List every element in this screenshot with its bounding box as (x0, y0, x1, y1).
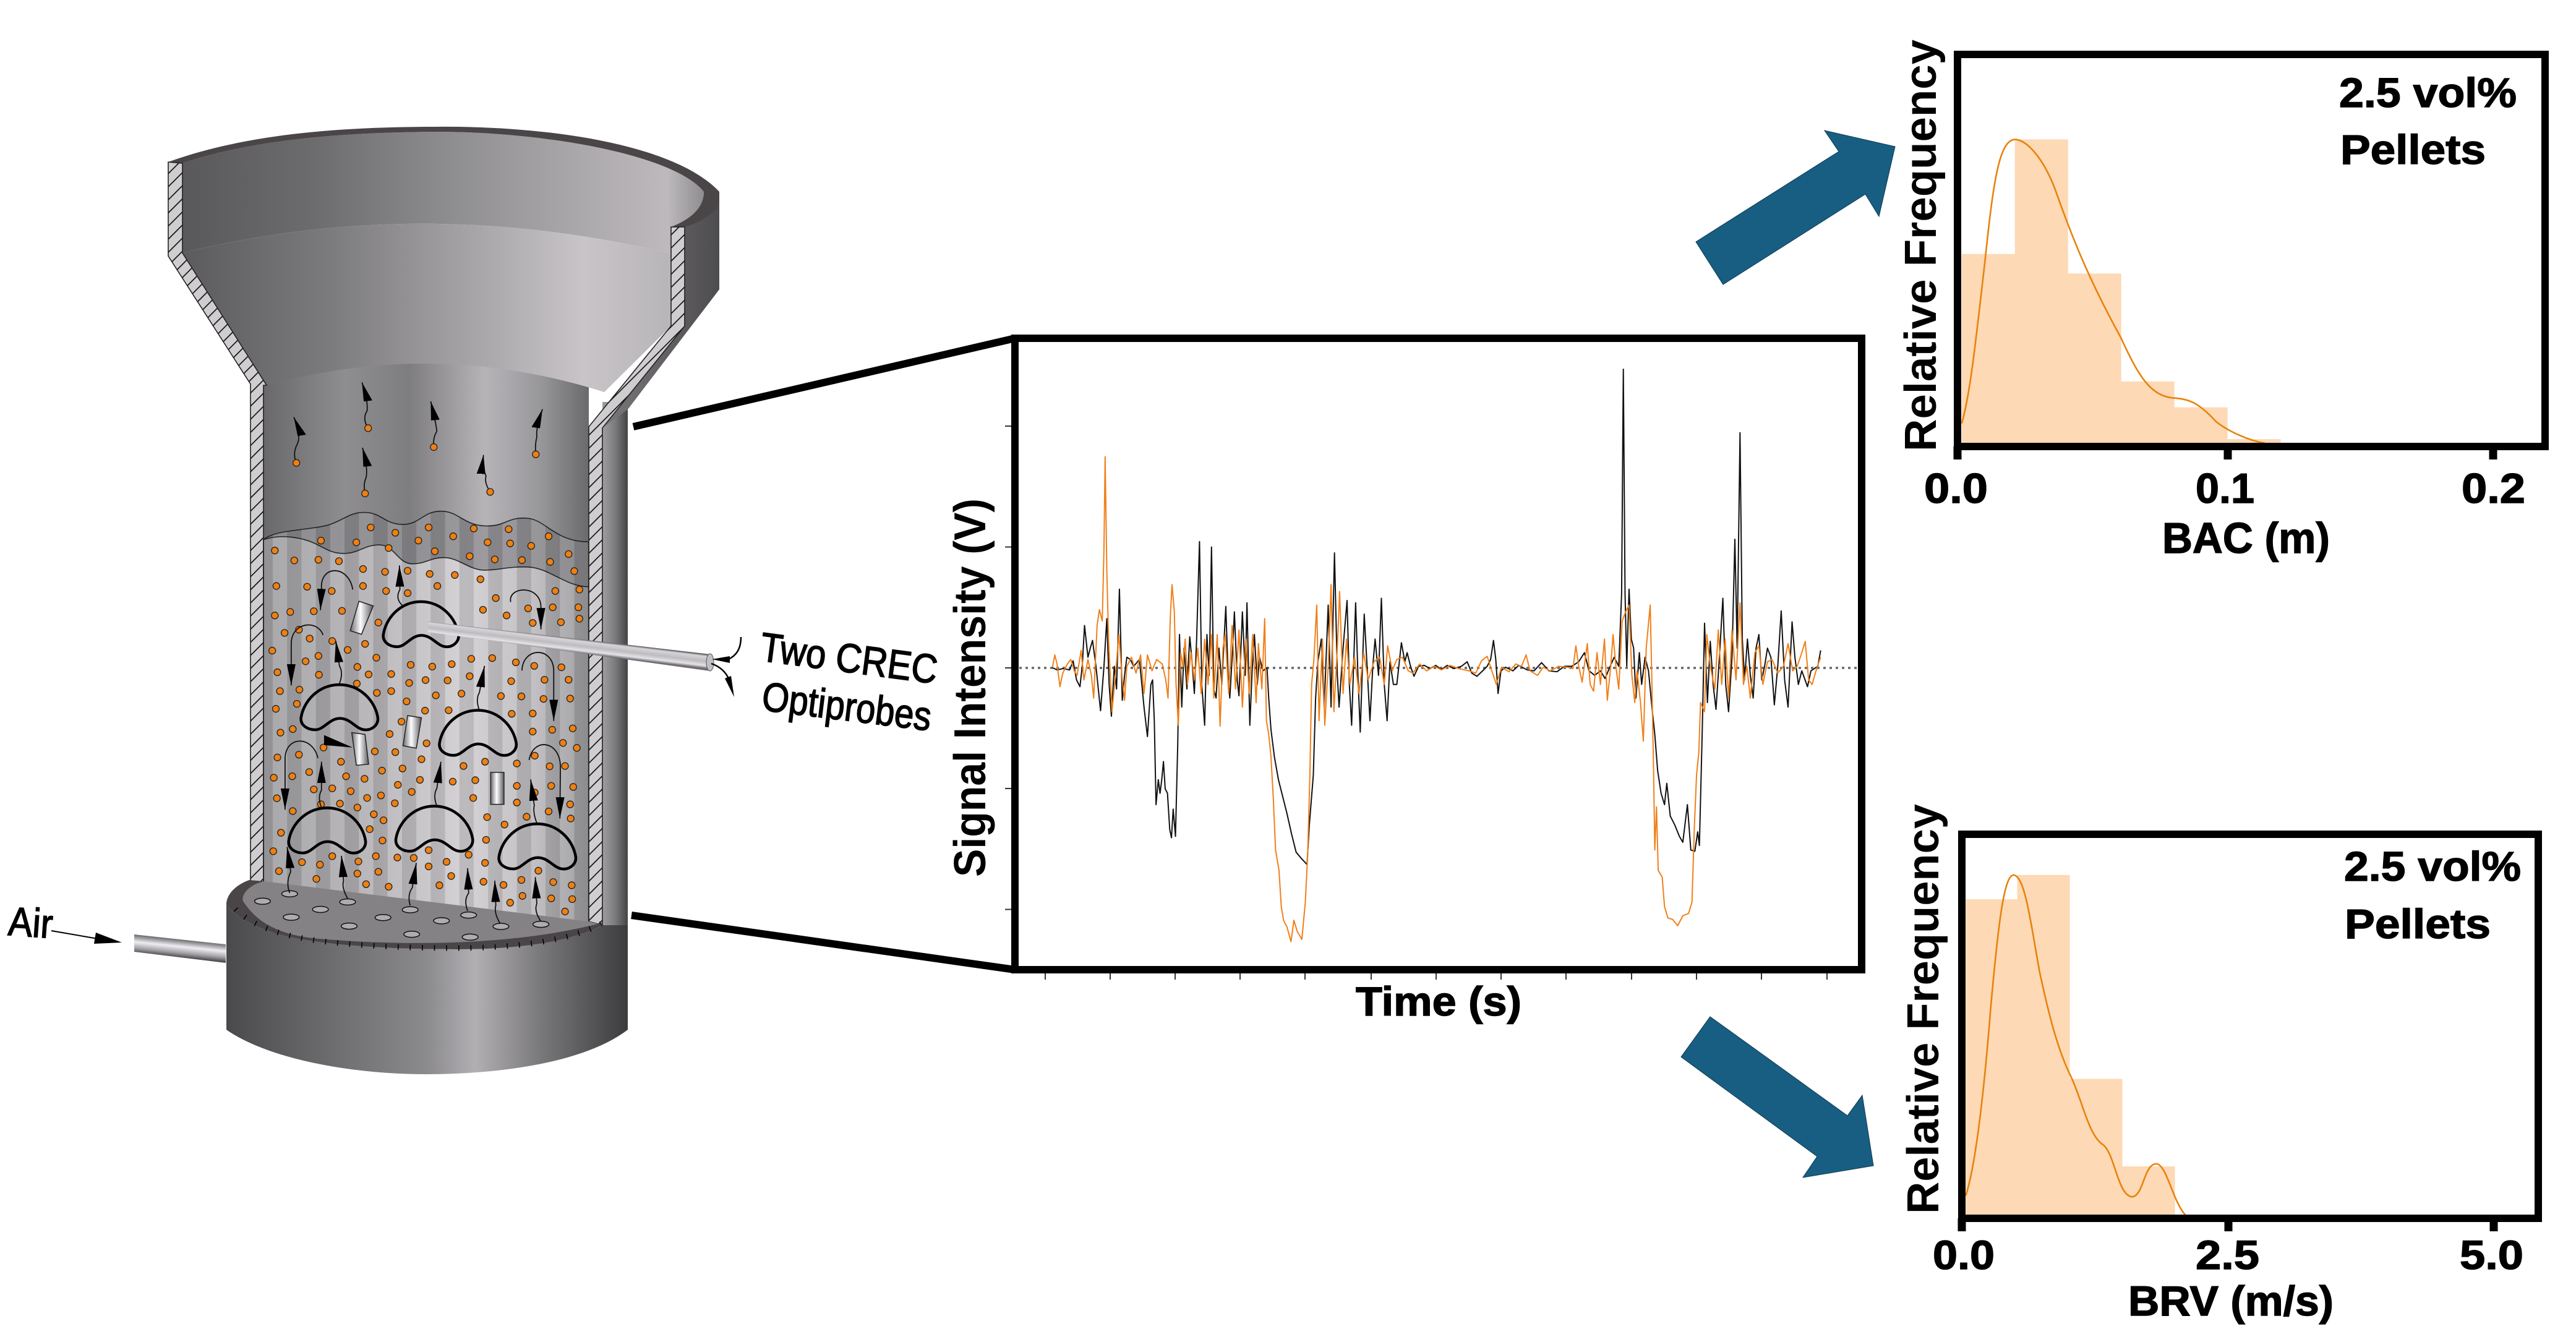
chart frame (1015, 338, 1862, 970)
bed stripes (263, 537, 589, 928)
tick labels: 0.0 (1924, 465, 1988, 512)
freeboard particles and arrows (293, 382, 542, 497)
annotation: 2.5 vol% (2339, 70, 2517, 116)
tick labels: 5.0 (2460, 1232, 2523, 1278)
splash stripes (263, 511, 589, 628)
optical probe (428, 622, 710, 671)
arrow: to BAC histogram (1696, 130, 1895, 284)
ticks (1962, 1218, 2494, 1231)
plate rim hatch ticks (236, 909, 601, 948)
splash zone (263, 511, 589, 928)
zoom connector lines (631, 338, 1015, 970)
ticks (1958, 447, 2493, 459)
tick labels: 0.2 (2462, 465, 2525, 512)
probe signal arrows (711, 637, 741, 697)
density curve (1966, 875, 2185, 1215)
funnel cone interior (182, 224, 671, 392)
gas distributor holes (255, 891, 549, 940)
y axis label: Relative Frequency (1896, 40, 1946, 451)
annotation: Pellets (2345, 901, 2491, 947)
density curve (1962, 139, 2265, 443)
x tick marks (1045, 972, 1827, 980)
annotation: Pellets (2340, 127, 2486, 173)
BAC histogram (1896, 40, 2545, 562)
tick labels: 2.5 (2196, 1232, 2259, 1278)
black probe trace (1053, 369, 1821, 865)
bed contents in detail (255, 524, 583, 940)
air label: Air (7, 898, 54, 947)
signal traces (1053, 369, 1821, 942)
y tick marks (1005, 426, 1012, 909)
plate rim band (226, 880, 602, 949)
tick labels: 0.0 (1933, 1232, 1995, 1278)
distributor plate underlay (243, 881, 602, 943)
x axis label: BAC (m) (2162, 514, 2330, 562)
histogram bars (1966, 875, 2185, 1216)
histogram bars (1962, 139, 2281, 446)
tick labels: 0.1 (2196, 465, 2254, 512)
air arrow (51, 931, 122, 944)
annotation (2344, 844, 2521, 947)
outer column right side (602, 402, 628, 928)
left hatched wall (168, 162, 267, 882)
frame (1962, 834, 2538, 1218)
probe tip (706, 654, 714, 671)
distributor plate (243, 881, 602, 943)
signal chart (946, 338, 1862, 1024)
bubbles (289, 602, 576, 869)
orange particles (269, 524, 583, 915)
funnel upper interior (182, 132, 704, 254)
zero reference line (1019, 667, 1857, 669)
probe label (758, 624, 940, 739)
dense bed (263, 537, 589, 928)
outer cone wall (602, 204, 719, 428)
annotation: 2.5 vol% (2344, 844, 2521, 890)
funnel rim (168, 127, 719, 227)
reactor: fluidized bed column (7, 127, 940, 1074)
arrow: to BRV histogram (1681, 1017, 1873, 1177)
annotation (2339, 70, 2517, 173)
base plenum (226, 905, 628, 1074)
probe label: Two CREC (758, 624, 940, 692)
flow arrows (285, 565, 560, 923)
column interior freeboard (263, 362, 589, 928)
air inlet pipe (134, 934, 226, 963)
tick labels (1924, 465, 2525, 512)
orange probe trace (1053, 457, 1821, 942)
y axis label: Signal Intensity (V) (946, 498, 995, 877)
cylindrical pellets (324, 601, 504, 805)
tick labels (1933, 1232, 2523, 1278)
x axis label: Time (s) (1356, 978, 1521, 1024)
probe label: Optiprobes (760, 673, 934, 739)
right hatched wall (589, 227, 685, 925)
bed surface and fluid region (263, 382, 589, 928)
BRV histogram (1899, 804, 2538, 1325)
frame (1958, 54, 2545, 447)
y axis label: Relative Frequency (1899, 804, 1948, 1214)
x axis label: BRV (m/s) (2128, 1278, 2334, 1325)
